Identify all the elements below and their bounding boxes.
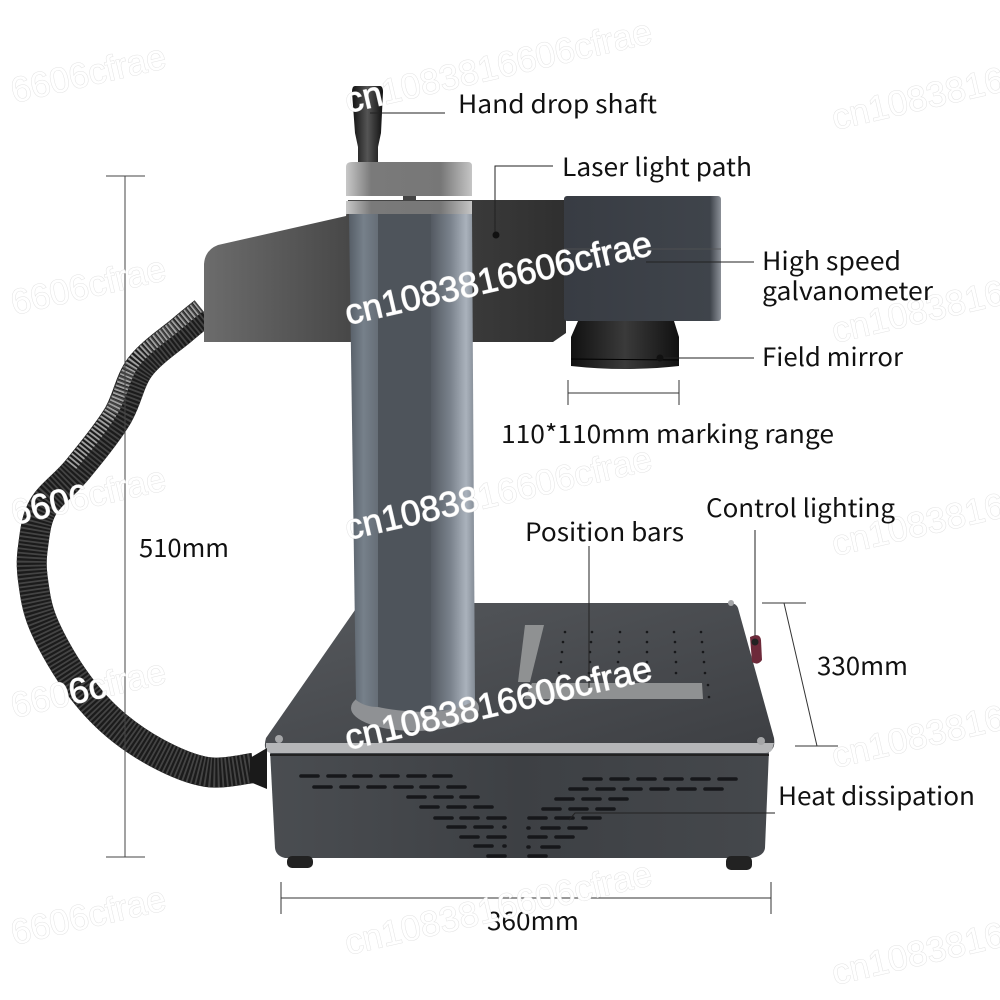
dimension: marking range	[568, 380, 679, 405]
watermarks: left and centre columns: 6606cfrae	[7, 878, 170, 953]
label: hand drop shaft: Hand drop shaft	[458, 85, 658, 121]
arm housing	[204, 200, 566, 342]
label: position bars: Position bars	[525, 513, 684, 549]
laser cable tube	[32, 307, 253, 773]
watermarks: left and centre columns: cn1083816606cfrae	[341, 438, 656, 548]
label: field mirror: Field mirror	[762, 338, 903, 374]
vent slots	[301, 776, 736, 856]
watermarks: left and centre columns: cn1083816606cfrae	[341, 853, 656, 963]
watermarks: left and centre columns: 6606cfrae	[7, 36, 170, 111]
control light knob	[750, 635, 762, 664]
plate rim	[266, 743, 774, 753]
label: 510mm: 510mm	[139, 529, 229, 565]
label: marking range: 110*110mm marking range	[501, 415, 834, 451]
upper collar plate	[346, 162, 472, 196]
label: high speed galvanometer	[762, 242, 933, 308]
label: laser light path: Laser light path	[562, 148, 752, 184]
watermarks: left and centre columns: 6606cfrae	[7, 651, 170, 726]
mounting holes	[558, 631, 710, 698]
field mirror lens	[571, 321, 679, 369]
watermarks: left and centre columns: 6606cfrae	[7, 458, 170, 533]
position bars	[518, 625, 703, 699]
leader dots	[492, 232, 664, 362]
watermarks: left and centre columns: cn1083816606cfrae	[341, 648, 656, 758]
label: 360mm: 360mm	[487, 902, 579, 938]
watermarks: left and centre columns	[7, 11, 656, 963]
watermarks: right column	[828, 28, 1000, 993]
galvanometer head	[564, 196, 721, 321]
plate corner screws	[275, 600, 765, 745]
cable connector	[250, 748, 267, 789]
hand drop handle	[352, 86, 383, 162]
base unit	[250, 600, 774, 870]
label: heat dissipation: Heat dissipation	[778, 777, 975, 813]
top plate	[265, 603, 774, 752]
watermarks: left and centre columns: 6606cfrae	[7, 248, 170, 323]
feet	[287, 856, 752, 870]
watermarks: left and centre columns: cn1083816606cfrae	[341, 11, 656, 121]
label: high speed galvanometer: High speed	[762, 242, 901, 278]
watermarks: left and centre columns: cn1083816606cfrae	[341, 223, 656, 333]
column assembly	[346, 86, 479, 731]
label: high speed galvanometer: galvanometer	[762, 272, 933, 308]
lower collar	[346, 201, 472, 214]
label: 330mm: 330mm	[817, 647, 908, 683]
base body	[270, 750, 769, 858]
column body	[349, 214, 378, 707]
label: control lighting: Control lighting	[706, 489, 895, 525]
dimension: width 360mm	[281, 882, 771, 914]
leader lines	[370, 113, 775, 820]
dimension: depth 330mm	[762, 603, 838, 746]
dimension: height 510mm	[106, 176, 145, 857]
column foot ring	[351, 685, 479, 731]
